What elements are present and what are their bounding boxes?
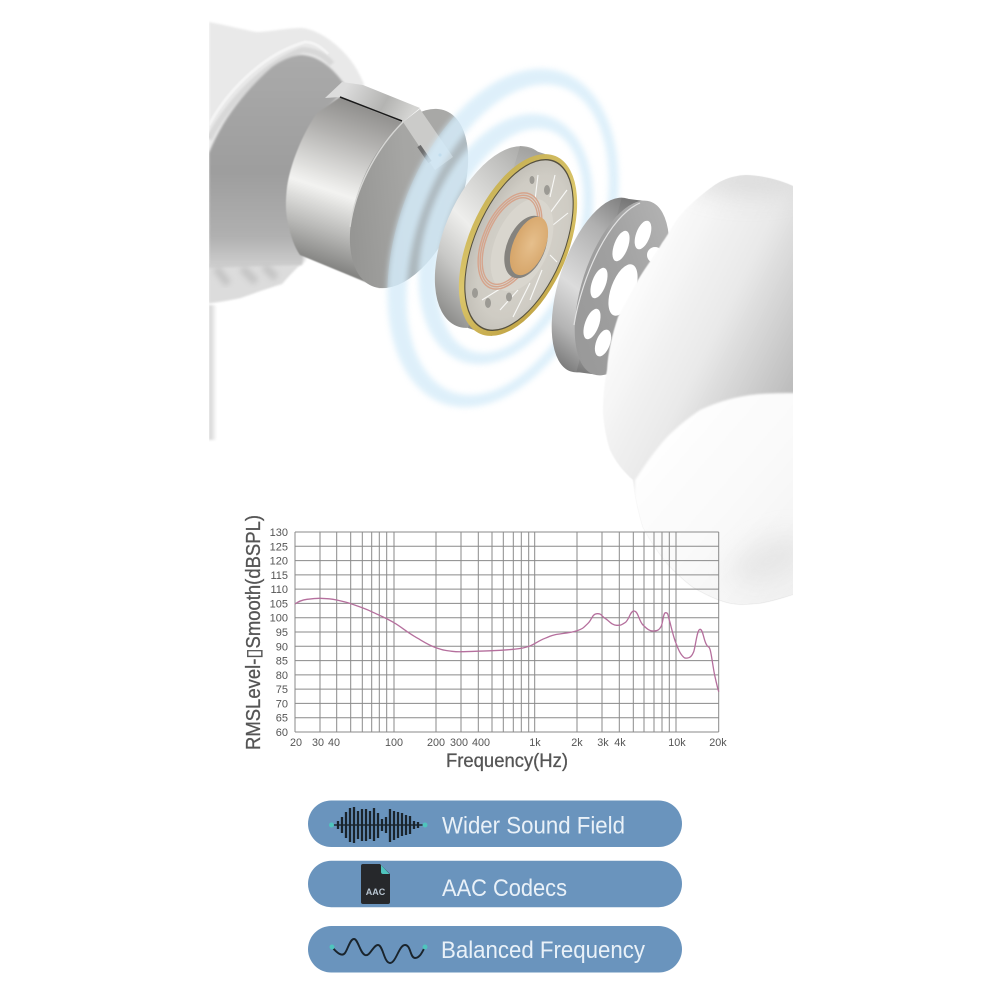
driver body — [434, 146, 545, 336]
x axis tick labels: 30 — [312, 737, 324, 749]
feature pill: wider sound field — [308, 800, 682, 847]
x axis tick labels: 20k — [709, 737, 727, 749]
y axis tick labels: 80 — [276, 670, 288, 682]
x axis tick labels: 4k — [614, 737, 626, 749]
y axis tick labels: 65 — [276, 713, 288, 725]
ear tip — [604, 175, 793, 605]
y axis tick labels: 100 — [270, 613, 288, 625]
copper coil — [477, 192, 542, 290]
y axis tick labels: 120 — [270, 556, 288, 568]
mounting dots — [472, 176, 550, 308]
feature pill: balanced frequency — [308, 926, 682, 972]
disc body — [552, 198, 644, 374]
label: Balanced Frequency — [441, 937, 645, 964]
x axis tick labels: 300 — [450, 737, 468, 749]
inner wave — [416, 112, 595, 366]
y axis tick labels: 125 — [270, 541, 288, 553]
x axis tick labels: 200 — [427, 737, 445, 749]
perforated disc — [552, 198, 668, 376]
y axis title: RMSLevel-▯Smooth(dBSPL) — [243, 515, 265, 750]
y axis tick labels: 75 — [276, 684, 288, 696]
x axis tick labels — [290, 737, 727, 749]
x axis tick labels: 2k — [571, 737, 583, 749]
earbud shell — [209, 22, 364, 303]
icon: sine wave — [330, 939, 428, 963]
y axis tick labels: 105 — [270, 598, 288, 610]
x axis tick labels: 100 — [385, 737, 403, 749]
x axis tick labels: 20 — [290, 737, 302, 749]
icon: AAC file — [361, 864, 390, 904]
driver unit — [434, 146, 578, 336]
y axis tick labels: 115 — [270, 570, 288, 582]
diaphragm — [465, 160, 573, 330]
y axis tick labels: 70 — [276, 698, 288, 710]
x axis tick labels: 1k — [529, 737, 541, 749]
y axis tick labels: 110 — [270, 584, 288, 596]
response curve — [295, 598, 719, 692]
x axis tick labels: 400 — [472, 737, 490, 749]
metal barrel — [286, 82, 468, 288]
y axis tick labels: 85 — [276, 656, 288, 668]
y axis tick labels: 130 — [270, 527, 288, 539]
feature pill: AAC codecs — [308, 861, 682, 907]
hero image: exploded earbud — [209, 22, 815, 620]
icon: waveform — [329, 807, 428, 843]
x axis tick labels: 3k — [597, 737, 609, 749]
infographic canvas — [209, 22, 793, 972]
centre surround — [500, 198, 554, 288]
y axis tick labels — [270, 527, 288, 739]
outer wave — [384, 67, 620, 409]
y axis tick labels: 60 — [276, 727, 288, 739]
diaphragm spokes — [482, 175, 568, 317]
label: AAC Codecs — [442, 875, 567, 902]
y axis tick labels: 95 — [276, 627, 288, 639]
icon: AAC file: AAC — [366, 887, 386, 897]
frequency response chart — [243, 515, 727, 772]
y axis tick labels: 90 — [276, 641, 288, 653]
x axis title: Frequency(Hz) — [446, 750, 568, 772]
x axis tick labels: 40 — [328, 737, 340, 749]
label: Wider Sound Field — [442, 812, 625, 840]
disc holes — [584, 220, 660, 356]
x axis tick labels: 10k — [668, 737, 686, 749]
earbud stem — [209, 304, 216, 440]
sound waves — [384, 67, 620, 409]
tint over barrel — [388, 116, 468, 288]
gold ring — [458, 154, 578, 336]
dome — [510, 216, 548, 276]
chart grid — [295, 532, 719, 732]
